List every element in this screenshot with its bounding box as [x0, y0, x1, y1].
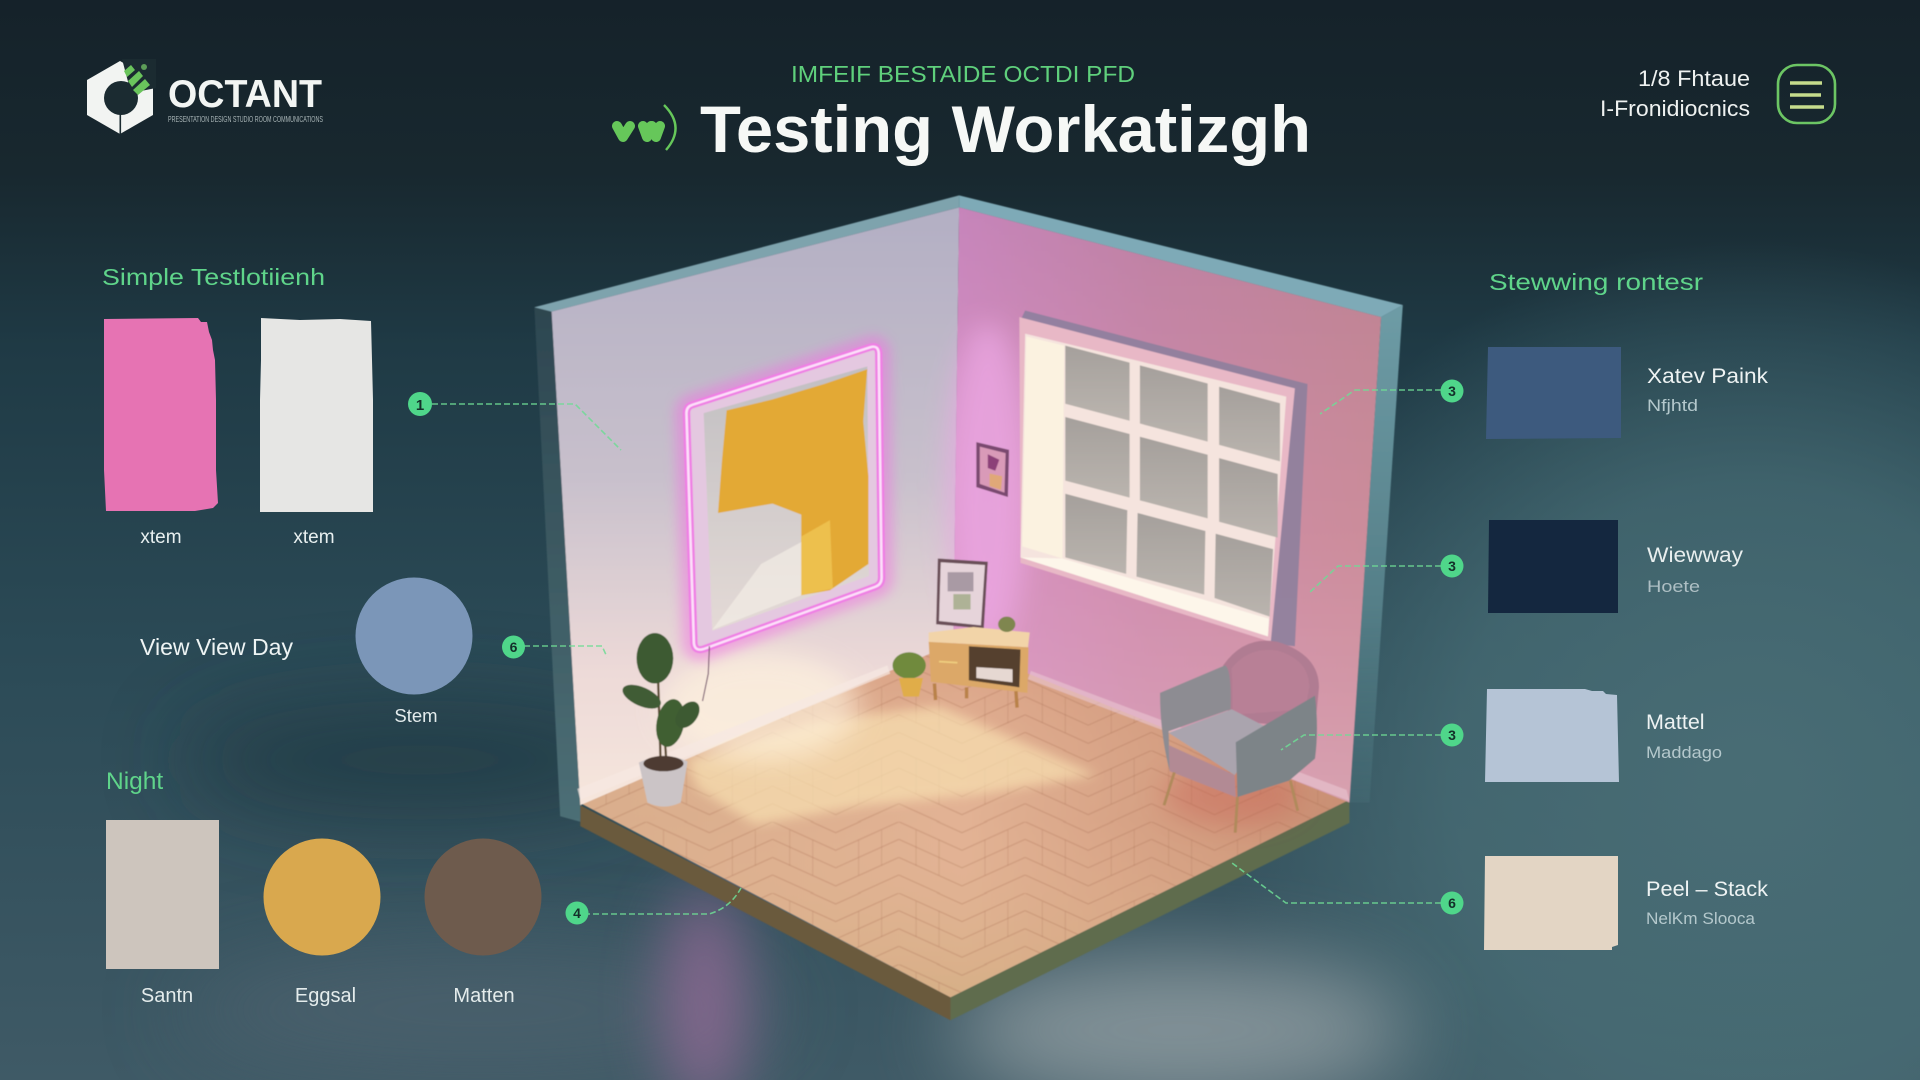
wall top surface	[534, 195, 1403, 317]
swatch label: Matten	[453, 985, 515, 1007]
callout 4: 3	[1448, 383, 1456, 399]
swatch label: xtem	[293, 527, 335, 548]
armchair	[1160, 641, 1319, 833]
isometric room illustration	[534, 195, 1403, 1020]
section heading: Stewwing rontesr	[1489, 269, 1703, 295]
callout 7	[1232, 863, 1464, 914]
overline: IMFEIF BESTAIDE OCTDI PFD	[791, 61, 1135, 87]
right wall	[948, 207, 1381, 803]
window panes	[1065, 346, 1280, 617]
small potted plant	[893, 652, 926, 697]
callout 2	[502, 636, 607, 658]
parquet floor	[580, 641, 1349, 997]
swatch: cream	[1484, 856, 1618, 950]
swatch: pale blue	[1485, 689, 1619, 782]
callout 6	[1281, 724, 1464, 750]
header title block	[617, 61, 1311, 166]
left wall outer edge	[534, 307, 580, 822]
callout 1	[408, 392, 621, 450]
callout 2: 6	[510, 639, 518, 655]
swatch text: Mattel	[1646, 710, 1705, 734]
swatch text: Peel – Stack	[1646, 877, 1768, 901]
swatch: brown circle	[424, 838, 542, 956]
swatch label: xtem	[140, 527, 182, 548]
swatch text: Xatev Paink	[1647, 364, 1768, 388]
panel: night swatches	[106, 768, 542, 1007]
swatch: slate blue	[1486, 347, 1621, 439]
left wall	[552, 207, 959, 805]
header right meta	[1600, 65, 1835, 123]
logo	[87, 59, 323, 134]
section heading: Simple Testlotiienh	[102, 264, 325, 290]
swatch: white	[260, 318, 373, 512]
brand name: OCTANT	[168, 73, 322, 116]
logo mark	[87, 59, 156, 134]
swatch label: Santn	[141, 985, 193, 1007]
section heading: Night	[106, 768, 163, 795]
framed picture on cabinet	[936, 558, 988, 629]
swatch: blue circle	[356, 578, 472, 694]
window	[1019, 311, 1308, 646]
callout 3	[566, 888, 741, 924]
swatch label: Stem	[394, 705, 438, 726]
neon frame with patched paint	[686, 347, 882, 701]
panel: stewing swatches: Nfjhtd	[1647, 396, 1698, 415]
callout 4	[1320, 380, 1464, 414]
small wall picture	[976, 442, 1009, 497]
large potted plant	[619, 633, 704, 807]
meta text: 1/8 Fhtaue	[1638, 66, 1750, 91]
callout 1: 1	[416, 397, 424, 414]
callout 5	[1309, 554, 1464, 593]
view label: View View Day	[140, 634, 293, 660]
title icon	[617, 105, 676, 150]
callout 7: 6	[1448, 895, 1456, 911]
swatch text: Wiewway	[1647, 543, 1743, 567]
swatch label: Eggsal	[295, 985, 356, 1007]
panel: simple testing swatches	[102, 264, 472, 726]
panel: stewing swatches: NelKm Slooca	[1646, 909, 1756, 928]
callout 6: 3	[1448, 727, 1456, 743]
cabinet	[929, 617, 1030, 708]
title: Testing Workatizgh	[700, 92, 1311, 166]
swatch: pink	[104, 318, 218, 511]
menu icon	[1778, 65, 1835, 123]
callout 5: 3	[1448, 558, 1456, 574]
panel: stewing swatches: Maddago	[1646, 743, 1722, 762]
swatch: navy	[1488, 520, 1618, 613]
swatch: greige	[106, 820, 219, 969]
panel: stewing swatches	[1484, 269, 1768, 950]
panel: stewing swatches: Hoete	[1647, 577, 1700, 596]
right wall outer edge	[1349, 305, 1403, 803]
callout 3: 4	[573, 905, 581, 921]
swatch: yellow circle	[264, 838, 380, 956]
header right meta: I-Fronidiocnics	[1600, 96, 1750, 121]
floor slab side	[580, 800, 1349, 1020]
brand tagline: PRESENTATION DESIGN STUDIO ROOM COMMUNICATIONS	[168, 114, 323, 124]
